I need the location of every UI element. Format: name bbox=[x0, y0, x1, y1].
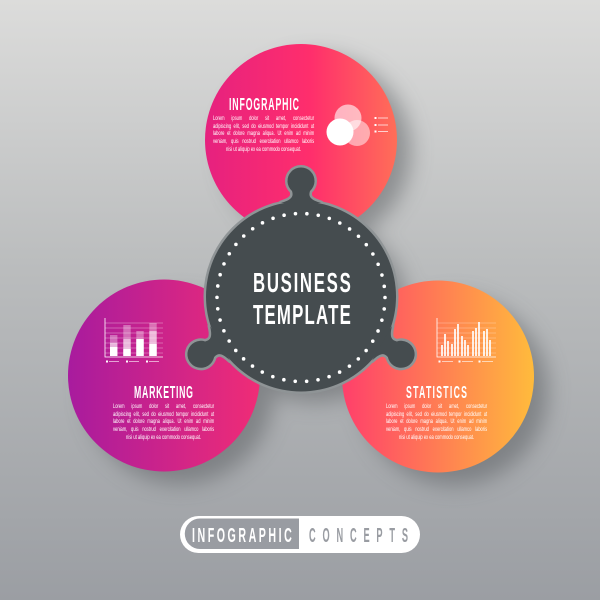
panel: infographic bbox=[205, 44, 397, 236]
soft shadows bbox=[86, 56, 548, 485]
body text: nisi ut aliquip ex ea commodo consequat. bbox=[226, 146, 301, 153]
grouped bar chart bbox=[437, 318, 496, 362]
heading: marketing: MARKETING bbox=[134, 382, 193, 402]
venn diagram icon bbox=[326, 104, 388, 146]
body text: labore et dolore magna aliqua. Ut enim ad minim bbox=[213, 130, 314, 137]
body text: Lorem ipsum dolor sit amet, consectetur bbox=[386, 403, 487, 410]
hub outline bbox=[179, 167, 423, 392]
top circle bbox=[205, 44, 397, 236]
hub fill bbox=[179, 167, 423, 392]
body text bbox=[213, 115, 315, 155]
body text: nisi ut aliquip ex ea commodo consequat. bbox=[399, 434, 474, 441]
body text: adipiscing elit, sed do eiusmod tempor incididunt ut bbox=[386, 411, 487, 418]
body text: veniam, quis nostrud exercitation ullamco laboris bbox=[213, 138, 314, 145]
body text: adipiscing elit, sed do eiusmod tempor incididunt ut bbox=[113, 411, 214, 418]
body text bbox=[113, 403, 215, 443]
pill bbox=[180, 516, 420, 553]
heading: statistics: STATISTICS bbox=[406, 382, 467, 402]
body text: adipiscing elit, sed do eiusmod tempor incididunt ut bbox=[213, 123, 314, 130]
pill left segment bbox=[185, 518, 299, 549]
panel: central hub bbox=[179, 167, 423, 392]
body text: labore et dolore magna aliqua. Ut enim ad minim bbox=[113, 418, 214, 425]
right circle bbox=[342, 280, 534, 472]
label right: CONCEPTS bbox=[309, 525, 408, 547]
body text bbox=[386, 403, 488, 443]
panel: statistics bbox=[342, 280, 534, 472]
dotted ring bbox=[217, 214, 385, 382]
badge: infographic concepts bbox=[180, 516, 420, 553]
hub title: BUSINESS bbox=[253, 267, 351, 298]
label left: INFOGRAPHIC bbox=[192, 524, 292, 547]
body text: Lorem ipsum dolor sit amet, consectetur bbox=[213, 115, 314, 122]
bar chart bbox=[105, 318, 163, 362]
hub title bbox=[253, 267, 351, 330]
panel: marketing bbox=[68, 280, 260, 472]
left circle bbox=[68, 280, 260, 472]
body text: Lorem ipsum dolor sit amet, consectetur bbox=[113, 403, 214, 410]
body text: veniam, quis nostrud exercitation ullamco laboris bbox=[113, 426, 214, 433]
body text: nisi ut aliquip ex ea commodo consequat. bbox=[126, 434, 201, 441]
hub title: TEMPLATE bbox=[253, 299, 351, 330]
body text: veniam, quis nostrud exercitation ullamco laboris bbox=[386, 426, 487, 433]
body text: labore et dolore magna aliqua. Ut enim ad minim bbox=[386, 418, 487, 425]
heading: infographic: INFOGRAPHIC bbox=[229, 94, 299, 114]
